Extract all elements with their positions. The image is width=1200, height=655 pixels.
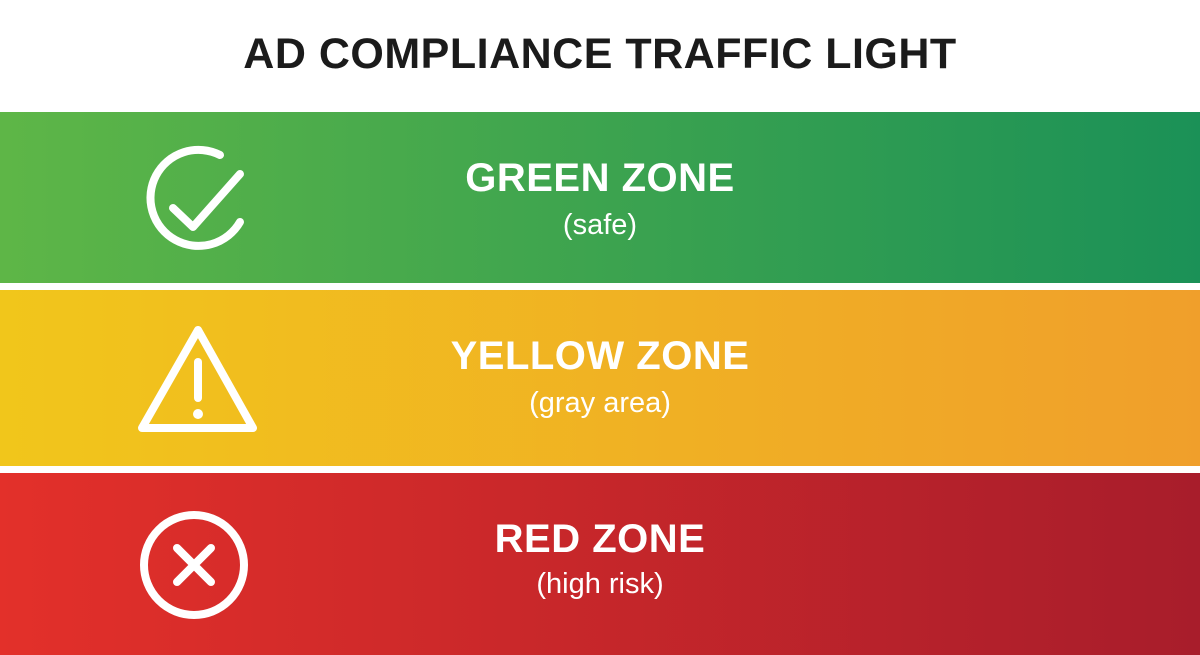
subtitle: gray area: (gray area) [529, 387, 671, 419]
subtitle: high risk: (high risk) [536, 568, 664, 600]
heading: yellow zone: YELLOW ZONE [451, 334, 749, 378]
icon: check circle [146, 146, 244, 250]
panel: green zone [0, 112, 1200, 283]
heading: red zone: RED ZONE [495, 517, 705, 561]
title: AD COMPLIANCE TRAFFIC LIGHT [243, 30, 957, 78]
panel: yellow zone [0, 290, 1200, 466]
heading: green zone: GREEN ZONE [465, 156, 735, 200]
icon: warning triangle [138, 326, 257, 432]
subtitle: safe: (safe) [563, 209, 637, 241]
panel: red zone [0, 473, 1200, 655]
icon: x circle [140, 511, 248, 619]
